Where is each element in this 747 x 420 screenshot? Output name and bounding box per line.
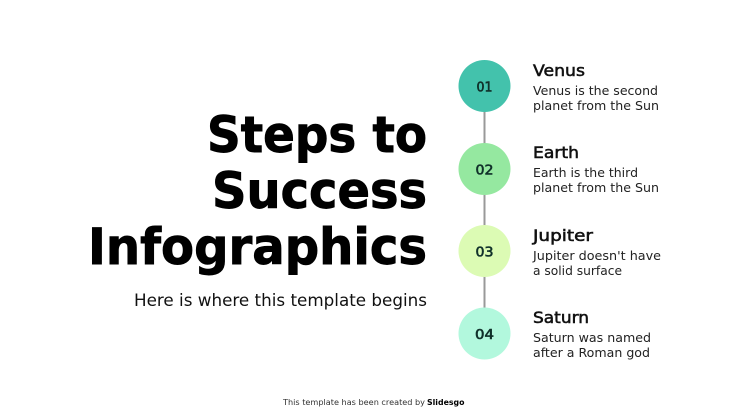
description: Earth	[533, 166, 659, 195]
badge 04: 04	[475, 328, 494, 343]
description: Saturn	[533, 331, 651, 360]
description: Venus	[533, 84, 659, 113]
description: Jupiter: Jupiter doesn't have	[532, 249, 661, 263]
description: Venus: planet from the Sun	[533, 99, 659, 113]
description: Earth: planet from the Sun	[533, 181, 659, 195]
title: Success	[212, 162, 427, 220]
badge 04	[458, 308, 510, 360]
badge 01	[458, 60, 510, 112]
badge 02: 02	[476, 164, 494, 178]
badge 03: 03	[476, 246, 494, 260]
title: Steps to	[207, 106, 427, 164]
badge 03	[458, 225, 510, 277]
footer credit: This template has been created by	[282, 398, 425, 407]
heading: Jupiter: Jupiter	[532, 226, 593, 245]
title	[88, 106, 427, 276]
title: Infographics	[88, 218, 427, 276]
description: Jupiter: a solid surface	[533, 264, 622, 278]
footer credit: Slidesgo	[427, 398, 465, 407]
description: Saturn: Saturn was named	[533, 331, 651, 345]
badge 02	[458, 143, 510, 195]
description: Earth: Earth is the third	[533, 166, 638, 180]
step 04: Saturn	[458, 308, 651, 360]
step 03: Jupiter	[458, 225, 661, 278]
heading: Earth: Earth	[533, 143, 579, 162]
subtitle: Here is where this template begins	[134, 291, 427, 310]
timeline connector	[484, 110, 486, 310]
step 01: Venus	[458, 60, 659, 113]
description: Saturn: after a Roman god	[533, 346, 650, 360]
step 02: Earth	[458, 143, 659, 195]
heading: Venus: Venus	[533, 61, 585, 80]
description: Jupiter	[532, 249, 661, 278]
heading: Saturn: Saturn	[533, 308, 589, 327]
badge 01: 01	[476, 80, 492, 96]
description: Venus: Venus is the second	[533, 84, 658, 98]
